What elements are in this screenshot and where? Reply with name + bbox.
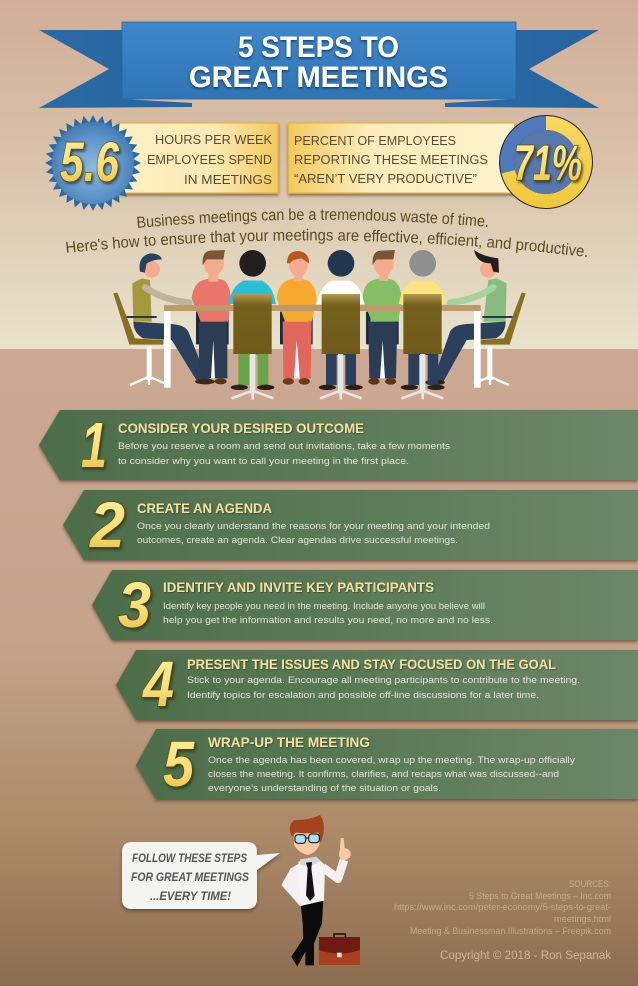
banner shape [92,570,638,640]
ribbon left tail [39,30,192,108]
gold panel left [118,123,278,193]
heading: WRAP-UP THE MEETING [208,734,370,750]
sources text: Meeting & Businessman Illustrations – Freepik.com [410,926,611,936]
stat text left: IN MEETINGS [184,172,272,187]
gold panel right [288,123,514,193]
numeral 4: 4 [141,648,174,720]
right arm [323,860,344,879]
floor background [0,349,638,986]
stat text right: REPORTING THESE MEETINGS [294,152,488,167]
banner shape [116,650,638,720]
stat text right: PERCENT OF EMPLOYEES [294,133,456,148]
legs [291,899,323,967]
briefcase [319,934,360,965]
hair [290,815,324,843]
numeral 2: 2 [89,489,125,561]
collar [300,857,320,867]
stat: percent of employees [288,115,593,209]
shirt torso [298,857,325,906]
meeting table illustration [113,250,526,399]
body text [163,601,493,626]
starburst badge [45,115,141,211]
body text [208,755,575,794]
person in red shirt [192,250,231,384]
body text: Stick to your agenda. Encourage all meeting participants to contribute to the meeting. [187,675,580,686]
stat text left [147,132,272,187]
banner shape [136,729,638,799]
body text: Before you reserve a room and send out invitations, take a few moments [118,441,450,452]
step 1 banner [39,409,638,481]
ribbon main band [122,22,516,99]
sources text: SOURCES: [569,879,611,889]
body text [118,441,450,467]
heading: PRESENT THE ISSUES AND STAY FOCUSED ON THE GOAL [187,656,556,672]
glasses [295,834,319,843]
numeral 3: 3 [118,569,151,641]
step 4 banner [116,648,638,720]
body text: Once you clearly understand the reasons for your meeting and your intended [137,521,490,532]
body text: to consider why you want to call your meeting in the first place. [118,456,409,467]
body text: Once the agenda has been covered, wrap up the meeting. The wrap-up officially [208,755,575,766]
stat: hours per week [45,115,278,211]
curved intro text: Here's how to ensure that your meetings are effective, efficient, and productive. [66,228,587,257]
sources text: https://www.inc.com/peter-economy/5-steps-to-great- [394,902,611,912]
speech bubble: FOR GREAT MEETINGS [131,870,249,884]
body text: Identify topics for escalation and possible off-line discussions for a later time. [187,690,539,701]
body text [137,521,490,546]
banner shape [63,490,638,560]
wall background [0,0,638,350]
body text [187,675,580,701]
number 5.6: 5.6 [60,130,120,193]
speech bubble: ...EVERY TIME! [150,889,231,903]
tie [306,862,315,901]
numeral 5: 5 [163,728,195,800]
body text: Identify key people you need in the meeting. Include anyone you believe will [163,601,485,612]
body text: help you get the information and results you need, no more and no less. [163,615,493,626]
stat text left: EMPLOYEES SPEND [147,152,272,167]
heading: IDENTIFY AND INVITE KEY PARTICIPANTS [163,579,434,595]
sources text: meetings.html [554,914,611,924]
stat text left: HOURS PER WEEK [155,132,272,147]
title text: 5 STEPS TO [238,31,399,64]
ribbon right tail [445,30,599,108]
copyright: Copyright © 2018 - Ron Sepanak [440,948,612,962]
businessman illustration [281,815,360,967]
stat text right [294,133,488,186]
heading: CREATE AN AGENDA [137,500,272,516]
curved intro text: Business meetings can be a tremendous waste of time. [137,208,488,228]
step 5 banner [136,728,638,800]
speech bubble: FOLLOW THESE STEPS [132,851,247,865]
pointing hand [339,838,351,860]
title text: GREAT MEETINGS [189,61,448,94]
banner shape [39,410,638,480]
body text: closes the meeting. It confirms, clarifies, and recaps what was discussed--and [208,769,559,780]
body text: everyone’s understanding of the situation or goals. [208,783,441,794]
head [294,831,319,855]
heading: CONSIDER YOUR DESIRED OUTCOME [118,420,364,436]
curved intro text [66,208,587,257]
step 3 banner [92,569,638,641]
number 71%: 71% [514,135,582,191]
left arm [281,863,306,906]
sources text: 5 Steps to Great Meetings – Inc.com [469,891,611,901]
sources text [394,879,611,936]
person back view white [317,250,364,399]
numeral 1: 1 [81,409,107,481]
body text: outcomes, create an agenda. Clear agendas drive successful meetings. [137,535,458,546]
speech bubble [122,842,280,909]
table [164,305,481,388]
person back view yellow [399,250,446,399]
stat text right: “AREN’T VERY PRODUCTIVE” [294,171,477,186]
step 2 banner [63,489,638,561]
person in orange shirt [277,251,317,385]
title ribbon [39,22,599,108]
donut chart 71% [499,115,593,209]
person back view cyan [228,250,276,399]
left seated person [113,253,215,385]
person in green shirt [363,250,402,385]
right seated person [425,250,526,385]
title text [189,31,448,94]
